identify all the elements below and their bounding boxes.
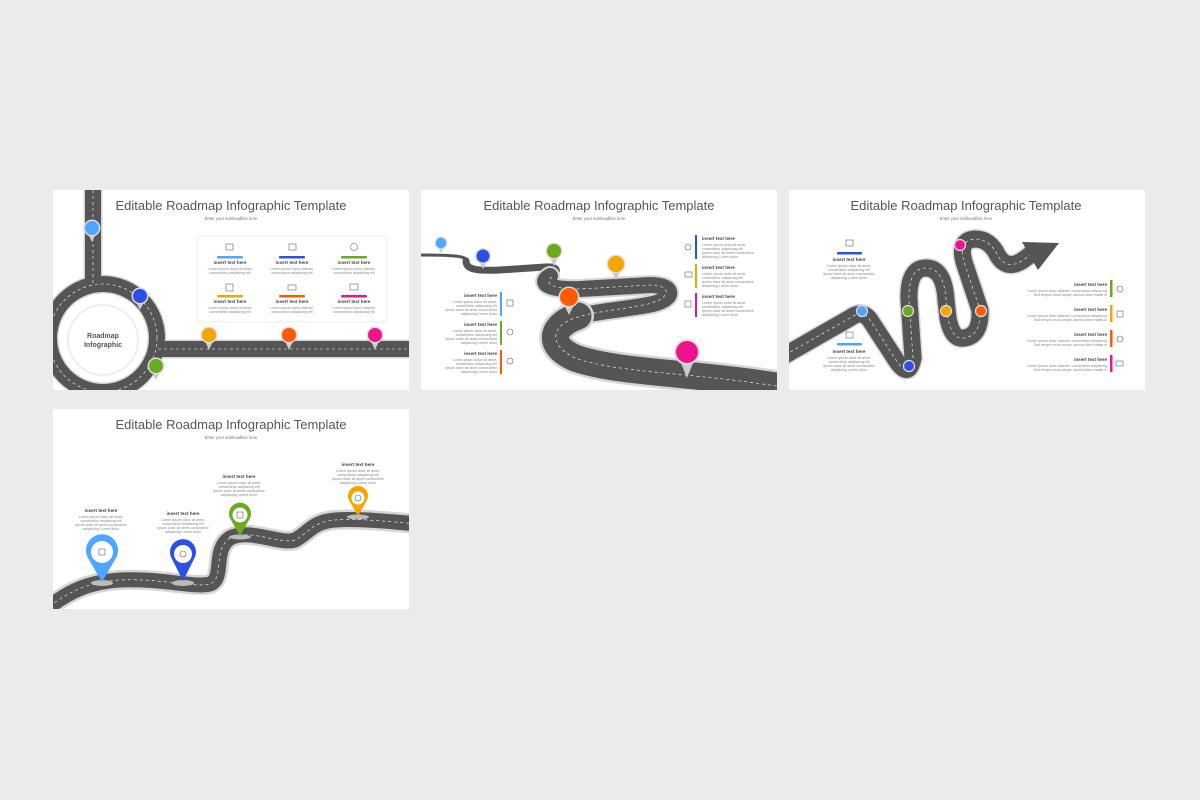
text blocks slide 4 xyxy=(75,462,385,534)
right text blocks slide 3: insert text here xyxy=(1074,282,1107,287)
title slide 4: Editable Roadmap Infographic Template xyxy=(115,417,347,432)
card with six items: consectetur adipiscing elit xyxy=(333,271,375,275)
center label circle: Roadmap xyxy=(87,333,119,340)
right text blocks slide 2: adipiscing Lorem dolor xyxy=(702,284,739,288)
text blocks slide 4: consectetur adipiscing elit xyxy=(218,485,260,489)
right text blocks slide 2: Lorem ipsum dolor sit amet, xyxy=(702,301,746,305)
left text blocks slide 3: insert text here xyxy=(833,349,866,354)
left text blocks slide 3: Lorem ipsum dolor sit amet, xyxy=(827,356,871,360)
card with six items: Lorem ipsum dolor sit amet xyxy=(208,267,252,271)
card with six items: Lorem ipsum dolor sitamet, xyxy=(270,306,314,310)
left text blocks slide 2: consectetur adipiscing elit xyxy=(456,333,497,337)
text blocks slide 4: insert text here xyxy=(85,508,118,513)
road slide 3 xyxy=(780,239,1034,370)
text blocks slide 4: Lorem ipsum dolor sit amet, xyxy=(161,518,205,522)
left text blocks slide 2: insert text here xyxy=(464,293,497,298)
text blocks slide 4: ipsum dolor sit amet consectetur xyxy=(75,523,128,527)
right text blocks slide 3: insert text here xyxy=(1074,332,1107,337)
right text blocks slide 2: ipsum dolor sit amet consectetur xyxy=(702,280,755,284)
right text blocks slide 2: consectetur adipiscing elit xyxy=(702,247,743,251)
card with six items: Lorem ipsum dolor sit amet xyxy=(208,306,252,310)
left text blocks slide 2: Lorem ipsum dolor sit amet, xyxy=(453,329,497,333)
center label circle xyxy=(68,305,138,375)
card with six items: Lorem ipsum dolor sitamet, xyxy=(332,306,376,310)
right text blocks slide 2: ipsum dolor sit amet consectetur xyxy=(702,251,755,255)
right text blocks slide 3: Lorem ipsum dolor sitamet, consectetur adipiscing xyxy=(1027,289,1107,293)
card with six items: consectetur adipiscing elit xyxy=(209,271,251,275)
left text blocks slide 2 xyxy=(445,292,513,374)
slide 1: roundabout roadmap xyxy=(49,185,415,392)
card with six items: consectetur adipiscing elit xyxy=(271,310,313,314)
subtitle slide 3: Enter your subheadline here xyxy=(940,216,993,221)
right text blocks slide 3: Lorem ipsum dolor sitamet, consectetur adipiscing xyxy=(1027,339,1107,343)
text blocks slide 4: consectetur adipiscing elit xyxy=(162,522,204,526)
center label circle: Infographic xyxy=(84,342,122,349)
card with six items: insert text here xyxy=(276,299,309,304)
left text blocks slide 2: adipiscing Lorem dolor xyxy=(461,341,498,345)
right text blocks slide 3: Sed tempor risus neque, lacinia diam mattis in xyxy=(1033,293,1107,297)
text blocks slide 4: ipsum dolor sit amet consectetur xyxy=(332,477,385,481)
text blocks slide 4: adipiscing Lorem dolor xyxy=(340,481,377,485)
road slide 4 xyxy=(45,519,420,610)
left text blocks slide 3: adipiscing Lorem dolor xyxy=(831,368,868,372)
left text blocks slide 3: Lorem ipsum dolor sit amet, xyxy=(827,264,871,268)
left text blocks slide 3 xyxy=(823,240,876,372)
right text blocks slide 3: Lorem ipsum dolor sitamet, consectetur adipiscing xyxy=(1027,364,1107,368)
right text blocks slide 3: Sed tempor risus neque, lacinia diam mattis in xyxy=(1033,368,1107,372)
slide 3: snake road with arrow xyxy=(780,190,1145,390)
left text blocks slide 3: consectetur adipiscing elit xyxy=(828,268,870,272)
card with six items: consectetur adipiscing elit xyxy=(333,310,375,314)
text blocks slide 4: insert text here xyxy=(223,474,256,479)
left text blocks slide 2: Lorem ipsum dolor sit amet, xyxy=(453,300,497,304)
text blocks slide 4: Lorem ipsum dolor sit amet, xyxy=(79,515,123,519)
right text blocks slide 2: insert text here xyxy=(702,294,735,299)
title slide 3: Editable Roadmap Infographic Template xyxy=(850,198,1082,213)
right text blocks slide 2: Lorem ipsum dolor sit amet, xyxy=(702,243,746,247)
right text blocks slide 3 xyxy=(1027,280,1123,372)
pins slide 4 xyxy=(86,486,369,586)
card with six items: insert text here xyxy=(338,299,371,304)
card with six items xyxy=(197,236,387,322)
text blocks slide 4: consectetur adipiscing elit xyxy=(337,473,379,477)
right text blocks slide 2: ipsum dolor sit amet consectetur xyxy=(702,309,755,313)
card with six items: Lorem ipsum dolor sitamet, xyxy=(332,267,376,271)
card with six items: insert text here xyxy=(338,260,371,265)
text blocks slide 4: insert text here xyxy=(342,462,375,467)
left text blocks slide 2: adipiscing Lorem dolor xyxy=(461,370,498,374)
right text blocks slide 3: insert text here xyxy=(1074,357,1107,362)
left text blocks slide 3: ipsum dolor sit amet consectetur xyxy=(823,364,876,368)
card with six items: Lorem ipsum dolor sitamet, xyxy=(270,267,314,271)
right text blocks slide 2 xyxy=(685,235,755,317)
right text blocks slide 2: insert text here xyxy=(702,236,735,241)
text blocks slide 4: adipiscing Lorem dolor xyxy=(165,530,202,534)
title slide 2: Editable Roadmap Infographic Template xyxy=(483,198,715,213)
right text blocks slide 3: Sed tempor risus neque, lacinia diam mattis in xyxy=(1033,318,1107,322)
left text blocks slide 2: adipiscing Lorem dolor xyxy=(461,312,498,316)
left text blocks slide 2: ipsum dolor sit amet consectetur xyxy=(445,366,498,370)
right text blocks slide 2: Lorem ipsum dolor sit amet, xyxy=(702,272,746,276)
left text blocks slide 2: insert text here xyxy=(464,322,497,327)
right text blocks slide 3: insert text here xyxy=(1074,307,1107,312)
subtitle slide 4: Enter your subheadline here xyxy=(205,435,258,440)
right text blocks slide 2: consectetur adipiscing elit xyxy=(702,305,743,309)
pins slide 2 xyxy=(434,236,700,378)
card with six items: consectetur adipiscing elit xyxy=(271,271,313,275)
text blocks slide 4: adipiscing Lorem dolor xyxy=(221,493,258,497)
right text blocks slide 2: adipiscing Lorem dolor xyxy=(702,313,739,317)
right text blocks slide 2: insert text here xyxy=(702,265,735,270)
right text blocks slide 2: adipiscing Lorem dolor xyxy=(702,255,739,259)
left text blocks slide 2: ipsum dolor sit amet consectetur xyxy=(445,308,498,312)
road: vertical and circle and horizontal xyxy=(49,185,415,392)
text blocks slide 4: Lorem ipsum dolor sit amet, xyxy=(217,481,261,485)
text blocks slide 4: insert text here xyxy=(167,511,200,516)
text blocks slide 4: Lorem ipsum dolor sit amet, xyxy=(336,469,380,473)
text blocks slide 4: ipsum dolor sit amet consectetur xyxy=(213,489,266,493)
left text blocks slide 2: insert text here xyxy=(464,351,497,356)
text blocks slide 4: ipsum dolor sit amet consectetur xyxy=(157,526,210,530)
left text blocks slide 2: ipsum dolor sit amet consectetur xyxy=(445,337,498,341)
text blocks slide 4: consectetur adipiscing elit xyxy=(80,519,122,523)
card with six items: consectetur adipiscing elit xyxy=(209,310,251,314)
pins slide 1 xyxy=(84,220,384,380)
right text blocks slide 3: Lorem ipsum dolor sitamet, consectetur adipiscing xyxy=(1027,314,1107,318)
subtitle slide 2: Enter your subheadline here xyxy=(573,216,626,221)
arrow head slide 3 xyxy=(1022,242,1059,270)
left text blocks slide 2: Lorem ipsum dolor sit amet, xyxy=(453,358,497,362)
left text blocks slide 2: consectetur adipiscing elit xyxy=(456,362,497,366)
card with six items: insert text here xyxy=(276,260,309,265)
title slide 1: Editable Roadmap Infographic Template xyxy=(115,198,347,213)
left text blocks slide 3: adipiscing Lorem dolor xyxy=(831,276,868,280)
right text blocks slide 2: consectetur adipiscing elit xyxy=(702,276,743,280)
left text blocks slide 3: ipsum dolor sit amet consectetur xyxy=(823,272,876,276)
slide 2: winding road roadmap xyxy=(421,190,800,390)
road slide 2 xyxy=(421,255,800,390)
text blocks slide 4: adipiscing Lorem dolor xyxy=(83,527,120,531)
left text blocks slide 3: insert text here xyxy=(833,257,866,262)
subtitle slide 1: Enter your subheadline here xyxy=(205,216,258,221)
left text blocks slide 2: consectetur adipiscing elit xyxy=(456,304,497,308)
slide 4: hill road with large pins xyxy=(45,409,420,610)
left text blocks slide 3: consectetur adipiscing elit xyxy=(828,360,870,364)
card with six items: insert text here xyxy=(214,299,247,304)
right text blocks slide 3: Sed tempor risus neque, lacinia diam mattis in xyxy=(1033,343,1107,347)
card with six items: insert text here xyxy=(214,260,247,265)
dots slide 3 xyxy=(856,240,986,372)
